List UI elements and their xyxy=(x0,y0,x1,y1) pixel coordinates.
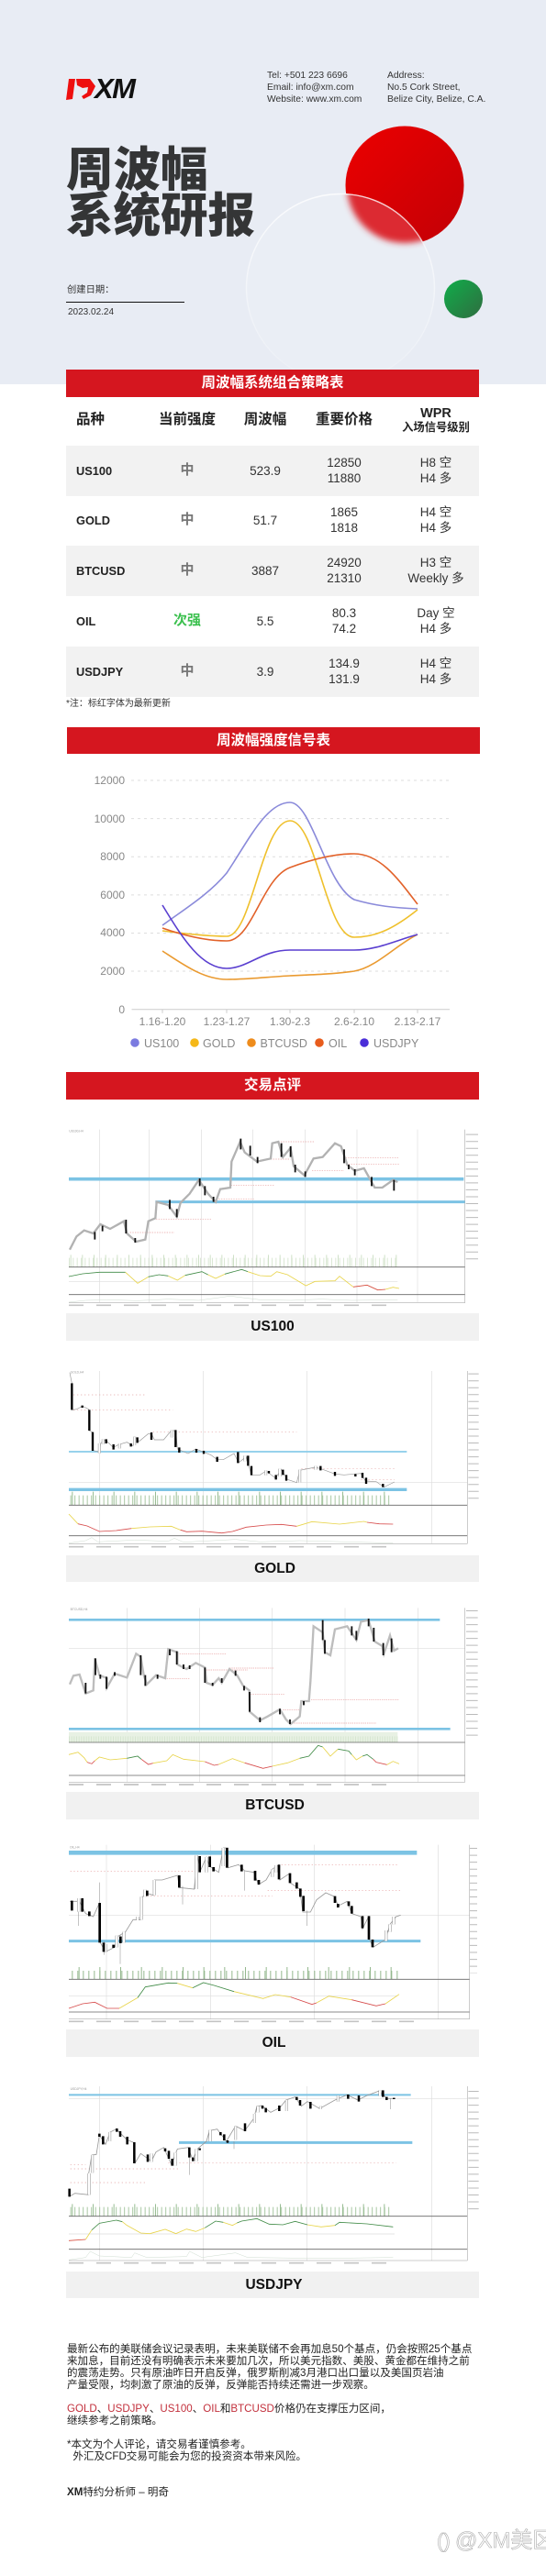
row: USDJPY: USDJPY xyxy=(76,665,123,679)
caption: US100 xyxy=(66,1313,479,1341)
commentary text: 来加息，目前还没有明确表示未来要加几次，所以美元指数、美股、黄金都在维持之前 xyxy=(67,2356,470,2367)
row: GOLD: GOLD xyxy=(76,514,110,527)
row: OIL: 次强 xyxy=(173,613,201,628)
chart: BTCUSD: BTCUSD,H4 xyxy=(71,1608,88,1611)
row: US100: 523.9 xyxy=(250,464,281,478)
address xyxy=(387,71,485,105)
row: USDJPY: 3.9 xyxy=(257,665,273,679)
y axis labels: 0 xyxy=(118,1003,125,1016)
caption: USDJPY: USDJPY xyxy=(245,2277,303,2293)
legend: GOLD xyxy=(203,1037,235,1050)
y axis labels xyxy=(95,774,125,1016)
legend: USDJPY xyxy=(373,1037,419,1050)
row: US100: US100 xyxy=(76,464,112,478)
row: USDJPY xyxy=(66,647,479,697)
heading: signal chart xyxy=(67,727,480,754)
caption: GOLD: GOLD xyxy=(254,1561,295,1576)
row: BTCUSD xyxy=(66,546,479,596)
chart: USDJPY: USDJPY,H4 xyxy=(71,2087,87,2091)
heading: trade commentary xyxy=(66,1072,479,1100)
contact details: Email: info@xm.com xyxy=(267,83,354,93)
commentary text: 继续参考之前策略。 xyxy=(67,2416,162,2427)
row: BTCUSD: 24920 xyxy=(327,556,362,569)
row: OIL: 74.2 xyxy=(332,622,356,636)
row: GOLD: 51.7 xyxy=(253,514,277,527)
title: 系统研报 xyxy=(66,189,255,242)
caption: USDJPY xyxy=(66,2272,479,2298)
y axis labels: 4000 xyxy=(100,926,125,939)
heading: trade commentary: 交易点评 xyxy=(244,1078,301,1093)
date: 2023.02.24 xyxy=(68,307,114,317)
caption: OIL: OIL xyxy=(262,2035,285,2051)
table header: 周波幅 xyxy=(244,412,286,427)
title: 周波幅 xyxy=(66,143,208,196)
heading: signal chart: 周波幅强度信号表 xyxy=(217,733,330,748)
x axis labels: 2.6-2.10 xyxy=(334,1015,374,1028)
commentary text: *本文为个人评论，请交易者谨慎参考。 xyxy=(67,2439,251,2450)
caption: BTCUSD xyxy=(66,1792,479,1819)
chart: OIL xyxy=(68,1845,477,2023)
address: No.5 Cork Street, xyxy=(387,83,461,93)
caption: US100: US100 xyxy=(251,1319,295,1334)
caption: OIL xyxy=(66,2029,479,2057)
row: USDJPY: H4 空 xyxy=(420,657,451,670)
row: USDJPY: 131.9 xyxy=(329,672,360,686)
series lines xyxy=(162,802,418,979)
row: GOLD xyxy=(76,505,451,535)
row: USDJPY: 134.9 xyxy=(329,657,360,670)
y axis labels: 8000 xyxy=(100,850,125,863)
row: OIL: Day 空 xyxy=(417,606,455,620)
x axis labels: 1.23-1.27 xyxy=(204,1015,251,1028)
analyst signature: XM特约分析师 – 明奇 xyxy=(67,2487,169,2498)
date divider xyxy=(66,302,184,303)
row: OIL: 80.3 xyxy=(332,606,356,620)
table header: 入场信号级别 xyxy=(402,421,470,434)
heading: strategy table: 周波幅系统组合策略表 xyxy=(201,375,343,391)
logo: XM: XM xyxy=(95,72,134,105)
x axis labels xyxy=(139,1015,441,1028)
y axis labels: 12000 xyxy=(95,774,125,787)
row: GOLD: 1818 xyxy=(330,521,358,535)
row: BTCUSD: 21310 xyxy=(327,571,362,585)
heading: strategy table xyxy=(66,370,479,397)
caption: BTCUSD: BTCUSD xyxy=(245,1797,305,1813)
logo: XM xyxy=(66,72,136,105)
row: OIL: OIL xyxy=(76,614,95,628)
chart: OIL: OIL,H4 xyxy=(70,1845,80,1849)
row: OIL: 5.5 xyxy=(257,614,273,628)
chart: US100: US100,H4 xyxy=(69,1130,84,1133)
row: GOLD: 1865 xyxy=(330,505,358,519)
row: GOLD: H4 多 xyxy=(420,521,451,535)
table header: 重要价格 xyxy=(316,412,373,427)
row: OIL xyxy=(76,606,455,636)
y axis labels: 6000 xyxy=(100,889,125,901)
row: USDJPY: 中 xyxy=(180,663,195,679)
commentary text: 产量受限，均刺激了原油的反弹，反弹能否持续还需进一步观察。 xyxy=(67,2380,374,2391)
row: OIL: H4 多 xyxy=(420,622,451,636)
y axis labels: 10000 xyxy=(95,813,125,825)
table header: 品种 xyxy=(76,412,105,427)
creation date label: 创建日期： xyxy=(67,285,114,295)
panel: header background xyxy=(0,0,546,384)
caption: GOLD xyxy=(66,1555,479,1582)
row: BTCUSD: BTCUSD xyxy=(76,564,125,578)
chart: USDJPY xyxy=(68,2086,479,2263)
table header: WPR xyxy=(420,406,451,421)
commentary text xyxy=(67,2343,472,2462)
row: US100: H4 多 xyxy=(420,471,451,485)
address: Address: xyxy=(387,71,425,81)
line chart: weekly volatility xyxy=(95,774,450,1050)
commentary text: 外汇及CFD交易可能会为您的投资资本带来风险。 xyxy=(72,2451,306,2462)
row: US100: H8 空 xyxy=(420,456,451,470)
x axis labels: 1.30-2.3 xyxy=(270,1015,310,1028)
contact details xyxy=(267,71,362,105)
row: BTCUSD: H3 空 xyxy=(420,556,451,569)
chart: US100 xyxy=(68,1130,478,1306)
table header xyxy=(76,406,470,434)
title xyxy=(66,143,255,242)
x axis labels: 1.16-1.20 xyxy=(139,1015,186,1028)
commentary text: 的震荡走势。只有原油昨日开启反弹，俄罗斯削减3月港口出口量以及美国页岩油 xyxy=(67,2368,444,2379)
chart: GOLD xyxy=(68,1371,479,1548)
legend: BTCUSD xyxy=(261,1037,307,1050)
chart: GOLD: GOLD,H4 xyxy=(71,1371,84,1375)
table note: *注：标红字体为最新更新 xyxy=(66,699,171,709)
x axis labels: 2.13-2.17 xyxy=(395,1015,441,1028)
row: US100: 12850 xyxy=(327,456,362,470)
contact details: Website: www.xm.com xyxy=(267,94,362,105)
legend: OIL xyxy=(329,1037,347,1050)
decorative glass and coloured circles xyxy=(246,127,483,319)
row: USDJPY: H4 多 xyxy=(420,672,451,686)
row: GOLD: 中 xyxy=(180,512,195,527)
row: BTCUSD: Weekly 多 xyxy=(407,571,464,585)
table header: 当前强度 xyxy=(159,412,216,427)
commentary text: 最新公布的美联储会议记录表明，未来美联储不会再加息50个基点，仍会按照25个基点 xyxy=(67,2344,472,2355)
chart: BTCUSD xyxy=(68,1608,478,1786)
row: BTCUSD: 3887 xyxy=(251,564,279,578)
commentary text: GOLD、USDJPY、US100、OIL和BTCUSD价格仍在支撑压力区间， xyxy=(67,2404,391,2415)
y axis labels: 2000 xyxy=(100,965,125,978)
contact details: Tel: +501 223 6696 xyxy=(267,71,348,81)
row: US100: 11880 xyxy=(328,471,361,485)
address: Belize City, Belize, C.A. xyxy=(387,94,485,105)
legend: US100 xyxy=(144,1037,179,1050)
watermark: () xyxy=(437,2529,451,2552)
legend xyxy=(130,1037,419,1050)
row: GOLD: H4 空 xyxy=(420,505,451,519)
row: US100: 中 xyxy=(180,462,195,478)
row: US100 xyxy=(66,446,479,496)
row: BTCUSD: 中 xyxy=(180,562,195,578)
